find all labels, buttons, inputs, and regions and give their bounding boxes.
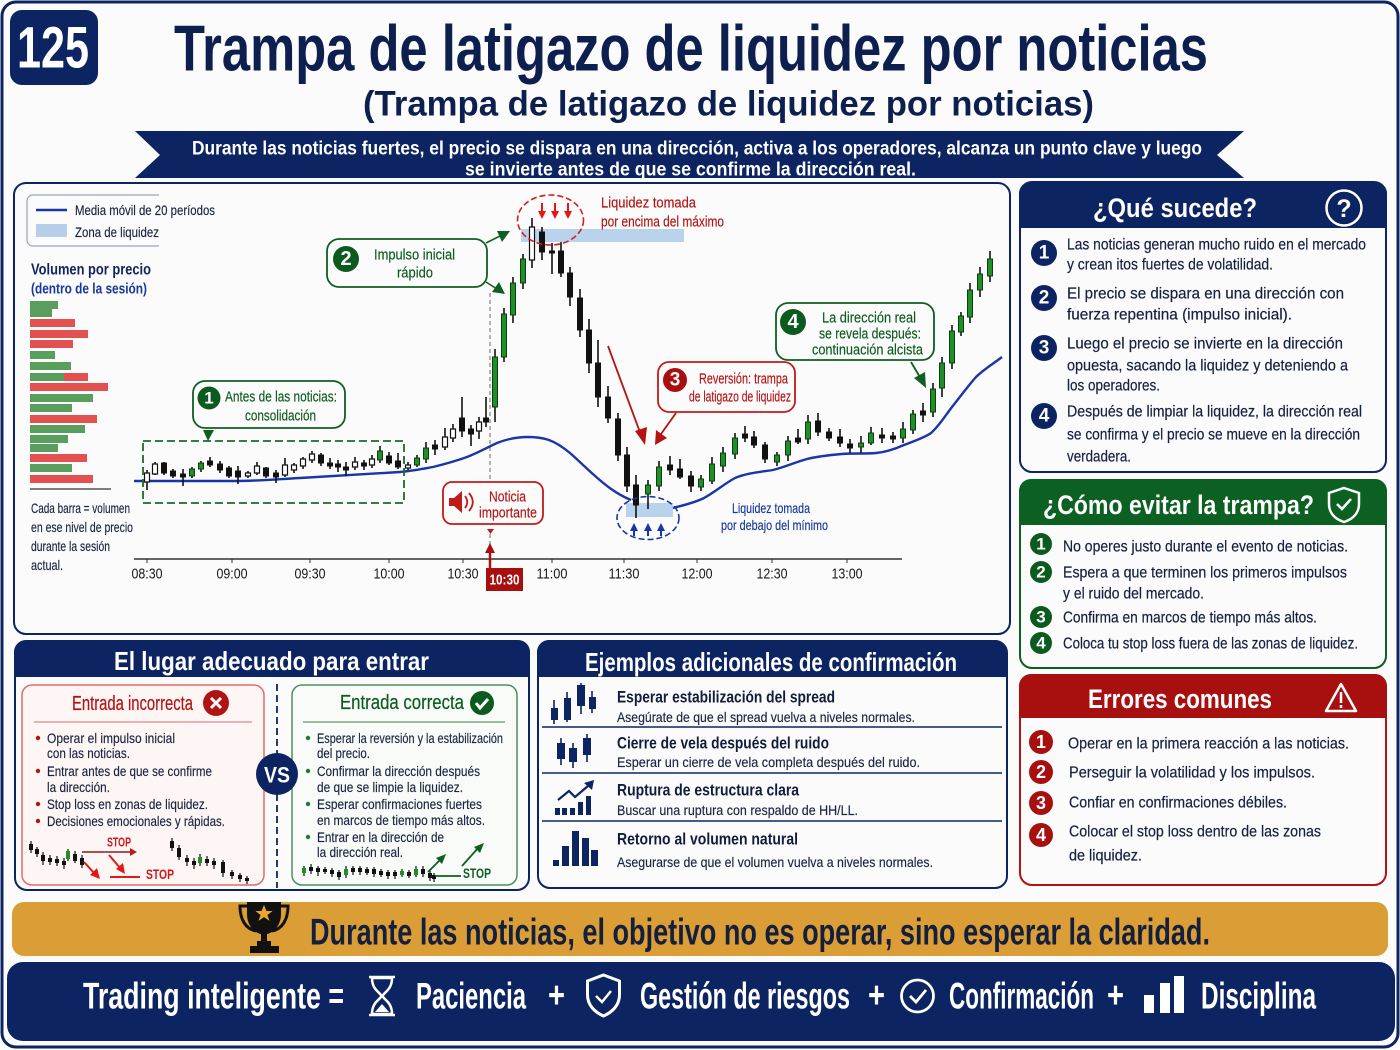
legend: Zona de liquidez (75, 224, 159, 240)
footer: smart trading formula (7, 962, 1395, 1041)
time axis: 09:30 (294, 566, 326, 582)
news vertical marker (489, 293, 491, 545)
icon: question mark: ? (1336, 195, 1352, 223)
footer: smart trading formula: Confirmación (949, 976, 1094, 1016)
time axis: 13:00 (832, 566, 862, 582)
error 1: Operar en la primera reacción a las noticias. (1068, 736, 1349, 752)
wrong entry list: Operar el impulso inicial (47, 730, 175, 746)
reversal arrows (608, 346, 676, 445)
wrong entry list (36, 730, 225, 829)
time axis: 12:30 (756, 566, 788, 582)
icon: hourglass (369, 977, 395, 1015)
error 3: 3 (1036, 793, 1046, 813)
liquidity below low marker: por debajo del mínimo (721, 517, 828, 533)
example 3: Buscar una ruptura con respaldo de HH/LL. (617, 802, 858, 818)
time axis: 11:00 (536, 566, 568, 582)
liquidity zone bottom (626, 503, 673, 517)
error 2: Perseguir la volatilidad y los impulsos. (1069, 764, 1315, 782)
right entry list: del precio. (317, 745, 370, 761)
tip 4: 4 (1036, 634, 1046, 652)
ribbon: summary (135, 131, 1244, 180)
tip 4 (1030, 632, 1358, 654)
error 3 (1029, 791, 1287, 815)
step 1: y crean itos fuertes de volatilidad. (1067, 256, 1273, 274)
wrong entry box (22, 685, 264, 885)
time axis: 12:00 (682, 566, 712, 582)
vs divider line (276, 684, 278, 888)
icon: warning (1326, 684, 1356, 711)
panel: common errors (1019, 674, 1387, 885)
heading: common errors (1019, 674, 1387, 718)
footer: smart trading formula: Trading inteligente = (83, 976, 344, 1016)
time axis: 10:00 (374, 566, 404, 582)
heading: what happens: ¿Qué sucede? (1093, 193, 1257, 223)
step 3: 3 (1039, 338, 1049, 358)
tip 3 (1030, 606, 1317, 628)
right entry list: la dirección real. (317, 844, 403, 860)
step 4 (1031, 403, 1362, 466)
tip 2: y el ruido del mercado. (1063, 586, 1204, 602)
volume note: en ese nivel de precio (31, 519, 133, 535)
legend (27, 195, 215, 246)
step 4: Después de limpiar la liquidez, la dirección real (1067, 404, 1362, 420)
heading: right place: El lugar adecuado para entrar (114, 646, 429, 676)
footer: smart trading formula: + (868, 974, 885, 1016)
icon: question mark (1326, 190, 1362, 226)
tip 1 (1030, 533, 1348, 556)
time axis: 08:30 (132, 566, 162, 582)
error 1: 1 (1036, 732, 1046, 752)
callout 3: reversal: Reversión: trampa (699, 370, 788, 388)
liquidity above high marker (518, 194, 724, 245)
icon: shield (588, 975, 620, 1016)
example 3: Ruptura de estructura clara (617, 780, 799, 800)
banner: key message (12, 902, 1388, 956)
mini chart: good stop: STOP (463, 865, 491, 881)
callout 3: reversal: 3 (670, 370, 680, 390)
example 3 (555, 780, 858, 818)
footer: smart trading formula: + (548, 974, 565, 1016)
time marker 10:30 (485, 543, 523, 591)
step 4: 4 (1039, 406, 1050, 426)
error 4: Colocar el stop loss dentro de las zonas (1069, 824, 1321, 840)
vs badge: VS (264, 762, 290, 788)
wrong entry list: Entrar antes de que se confirme (47, 763, 212, 779)
panel: how to avoid (1019, 479, 1387, 668)
icon: trophy (240, 902, 288, 953)
tip 2 (1030, 561, 1347, 602)
callout 4: real direction: se revela después: (819, 326, 921, 342)
heading: right place (14, 640, 530, 677)
vs badge (256, 753, 298, 795)
time axis: 11:30 (608, 566, 640, 582)
callout 4: real direction: La dirección real (822, 310, 916, 326)
example 2: Cierre de vela después del ruido (617, 734, 829, 752)
mini chart: good stop (302, 843, 491, 882)
right entry list: Esperar la reversión y la estabilización (317, 730, 503, 746)
example 1: Esperar estabilización del spread (617, 688, 835, 706)
callout 1: consolidation zone (143, 381, 404, 503)
ribbon: summary: Durante las noticias fuertes, el precio se dispara en una dirección, activa a los operadores, alcanza un punto clave y luego (192, 138, 1202, 160)
panel: additional confirmation examples (537, 640, 1007, 888)
footer: smart trading formula: + (1107, 974, 1124, 1016)
time axis: 10:30 (448, 566, 478, 582)
error 3: Confiar en confirmaciones débiles. (1069, 794, 1287, 812)
callout 2: initial impulse: Impulso inicial (374, 246, 455, 264)
volume note: actual. (31, 557, 63, 573)
time marker 10:30: 10:30 (490, 572, 520, 588)
example 1: Asegúrate de que el spread vuelva a niveles normales. (617, 709, 915, 725)
error 2: 2 (1036, 762, 1046, 782)
right entry list (306, 730, 503, 860)
step 3 (1031, 335, 1348, 394)
callout 1: consolidation zone: Antes de las noticias: (225, 388, 337, 406)
step 3: Luego el precio se invierte en la dirección (1067, 336, 1343, 352)
right entry list: en marcos de tiempo más altos. (317, 812, 485, 828)
heading: examples: Ejemplos adicionales de confirmación (585, 647, 957, 677)
heading: examples (537, 640, 1007, 677)
step 4: verdadera. (1067, 448, 1131, 466)
mini chart: bad stops: STOP (107, 834, 131, 850)
wrong entry list: Stop loss en zonas de liquidez. (47, 796, 208, 812)
tip 2: 2 (1036, 562, 1046, 582)
liquidity above high marker: por encima del máximo (601, 214, 724, 230)
tip 3: Confirma en marcos de tiempo más altos. (1063, 610, 1317, 626)
volume note (31, 500, 133, 573)
ribbon: summary: se invierte antes de que se confirme la dirección real. (465, 160, 916, 180)
callout: important news (443, 482, 543, 534)
tip 1: 1 (1036, 534, 1046, 554)
step 3: opuesta, sacando la liquidez y deteniendo a (1067, 358, 1348, 374)
callout 2: initial impulse: 2 (340, 248, 352, 270)
icon: cross (203, 690, 229, 716)
right entry box (292, 685, 517, 885)
right entry list: de que se limpie la liquidez. (317, 779, 463, 795)
callout 3: reversal (658, 362, 795, 412)
example 1 (551, 683, 915, 725)
volume profile heading: Volumen por precio (31, 262, 151, 278)
step 1: 1 (1039, 242, 1050, 264)
callout 2: initial impulse: rápido (397, 264, 433, 282)
error 1 (1029, 730, 1349, 754)
time axis (132, 559, 902, 582)
right entry list: Esperar confirmaciones fuertes (317, 796, 482, 812)
right entry box: Entrada correcta (340, 692, 465, 714)
icon: bars (1144, 976, 1184, 1013)
panel: what happens (1019, 182, 1387, 472)
icon: check (470, 691, 494, 715)
tip 2: Espera a que terminen los primeros impulsos (1063, 564, 1347, 582)
icon: closing candles (557, 734, 591, 768)
callout 1: consolidation zone: consolidación (245, 408, 316, 424)
callout: important news: importante (479, 504, 537, 522)
volume profile heading: (dentro de la sesión) (31, 280, 147, 298)
icon: breakout (555, 780, 594, 815)
right entry list: Entrar en la dirección de (317, 829, 444, 845)
liquidity zone top (521, 229, 684, 242)
step 3: los operadores. (1067, 378, 1160, 394)
callout 2: initial impulse (327, 231, 510, 294)
mini chart: bad stops (29, 834, 249, 884)
callout 4: real direction (776, 303, 934, 388)
badge: number 125: 125 (17, 16, 89, 80)
step 2: El precio se dispara en una dirección con (1067, 286, 1344, 302)
footer: smart trading formula: Paciencia (416, 976, 526, 1016)
wrong entry box: Entrada incorrecta (72, 693, 194, 715)
example 4 (553, 830, 933, 870)
time axis: 09:00 (216, 566, 248, 582)
error 4 (1029, 823, 1321, 864)
liquidity below low marker: Liquidez tomada (732, 500, 810, 516)
icon: circle check (902, 980, 934, 1012)
step 4: se confirma y el precio se mueve en la dirección (1067, 426, 1360, 444)
tip 1: No operes justo durante el evento de noticias. (1063, 538, 1348, 556)
volume profile heading (31, 262, 151, 298)
callout 4: real direction: 4 (787, 311, 799, 333)
volume note: durante la sesión (31, 538, 110, 554)
wrong entry list: Decisiones emocionales y rápidas. (47, 813, 225, 829)
heading: what happens (1019, 182, 1387, 228)
icon: candles (551, 683, 596, 724)
wrong entry list: con las noticias. (47, 745, 130, 761)
liquidity below low marker (617, 496, 828, 540)
heading: how to avoid: ¿Cómo evitar la trampa? (1043, 490, 1314, 520)
panel: chart (14, 183, 1010, 634)
subtitle: (Trampa de latigazo de liquidez por noticias) (363, 84, 1094, 124)
step 1 (1031, 236, 1366, 274)
step 2 (1031, 285, 1344, 324)
heading: how to avoid (1019, 479, 1387, 525)
volume profile bars (30, 301, 111, 489)
panel: right place to enter (14, 640, 530, 890)
right entry list: Confirmar la dirección después (317, 763, 480, 779)
tip 3: 3 (1036, 608, 1046, 626)
legend: Media móvil de 20 períodos (75, 202, 215, 218)
callout 3: reversal: de latigazo de liquidez (689, 388, 791, 406)
volume note: Cada barra = volumen (31, 500, 130, 516)
example 2 (557, 734, 920, 770)
liquidity above high marker: Liquidez tomada (601, 194, 697, 212)
error 4: de liquidez. (1069, 848, 1142, 864)
step 2: 2 (1039, 288, 1049, 308)
badge: number 125 (10, 10, 98, 85)
example 4: Asegurarse de que el volumen vuelva a niveles normales. (617, 854, 933, 870)
icon: shield check (1329, 488, 1359, 522)
example 4: Retorno al volumen natural (617, 830, 798, 848)
error 4: 4 (1036, 825, 1046, 845)
example 2: Esperar un cierre de vela completa después del ruido. (617, 754, 920, 770)
callout: important news: Noticia (489, 488, 527, 506)
footer: smart trading formula: Disciplina (1201, 976, 1316, 1016)
icon: volume bars (553, 831, 598, 866)
mini chart: bad stops: STOP (146, 866, 174, 882)
callout 1: consolidation zone: 1 (204, 388, 214, 408)
step 2: fuerza repentina (impulso inicial). (1067, 306, 1292, 324)
callout 4: real direction: continuación alcista (812, 342, 924, 358)
error 2 (1029, 760, 1315, 784)
wrong entry list: la dirección. (47, 779, 110, 795)
candlesticks (144, 218, 992, 518)
footer: smart trading formula: Gestión de riesgos (640, 976, 850, 1016)
heading: common errors: Errores comunes (1088, 684, 1272, 714)
moving average line (134, 357, 1002, 508)
